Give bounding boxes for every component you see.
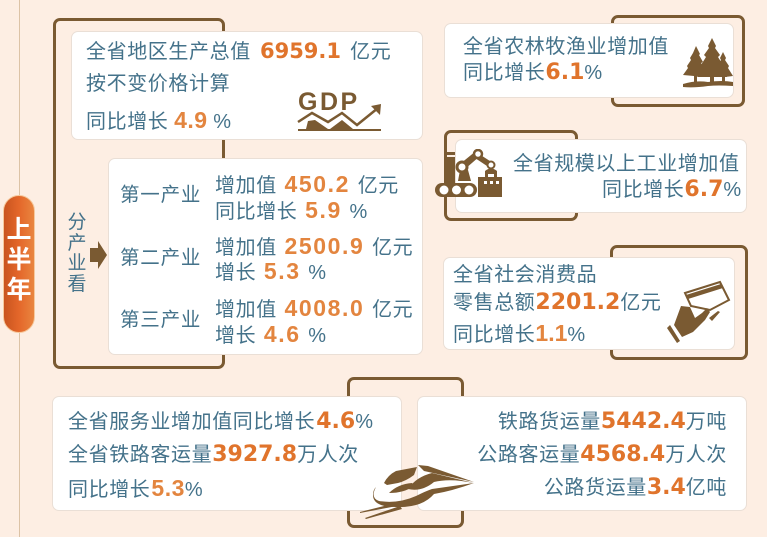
text: rail growth: 同比增长5.3% <box>68 475 203 501</box>
text: primary growth: 同比增长 5.9 % <box>215 197 368 223</box>
panel: agriculture <box>444 23 734 98</box>
text: rail passengers: 全省铁路客运量3927.8万人次 <box>68 442 359 467</box>
timeline line <box>19 0 20 537</box>
text: industry value: 全省规模以上工业增加值 <box>513 153 740 175</box>
panel: industry <box>455 139 747 213</box>
label: by industry: 看 <box>67 274 86 294</box>
label: by industry: 业 <box>67 253 86 274</box>
pill: first half of year <box>3 195 35 333</box>
frame: agriculture <box>611 15 745 107</box>
text: primary industry: 第一产业 <box>120 184 201 206</box>
text: constant price: 按不变价格计算 <box>86 73 230 95</box>
icon: arrow <box>90 241 107 269</box>
pill: first half of year: 上 <box>6 216 32 244</box>
panel: retail <box>443 257 735 350</box>
icon: GDP chart <box>297 88 381 131</box>
text: agriculture growth: 同比增长6.1% <box>463 60 603 85</box>
label: by industry: 产 <box>67 232 86 254</box>
icon: factory robot <box>435 149 502 197</box>
panel: sectors <box>108 158 423 355</box>
text: services growth: 全省服务业增加值同比增长4.6% <box>68 409 374 434</box>
pill: first half of year: 半 <box>6 246 32 274</box>
icon: hand with card <box>667 280 730 343</box>
text: secondary industry: 第二产业 <box>120 247 201 269</box>
label: by industry: 分 <box>67 212 86 233</box>
text: primary value: 增加值 450.2 亿元 <box>215 171 399 197</box>
text: road freight: 公路货运量3.4亿吨 <box>544 475 727 500</box>
icon: GDP chart: GDP <box>298 88 360 116</box>
frame: main bracket <box>53 18 225 369</box>
text: GDP total: 全省地区生产总值 6959.1 亿元 <box>86 39 391 63</box>
text: retail label: 全省社会消费品 <box>453 264 597 286</box>
panel: services and rail <box>52 396 402 511</box>
icon: trees <box>683 38 733 88</box>
icon: high-speed train <box>360 465 474 519</box>
frame: transport <box>347 377 464 528</box>
panel: freight <box>417 396 747 511</box>
text: GDP growth: 同比增长 4.9 % <box>86 107 232 133</box>
text: agriculture value: 全省农林牧渔业增加值 <box>463 36 669 58</box>
frame: industry <box>444 130 578 221</box>
text: tertiary industry: 第三产业 <box>120 309 201 331</box>
text: industry growth: 同比增长6.7% <box>602 177 742 202</box>
frame: retail <box>610 245 748 360</box>
pill: first half of year: 年 <box>6 276 32 304</box>
text: secondary value: 增加值 2500.9 亿元 <box>215 233 413 259</box>
text: retail growth: 同比增长1.1% <box>453 320 586 346</box>
text: retail total: 零售总额2201.2亿元 <box>453 290 662 315</box>
label: by industry <box>67 212 86 294</box>
text: tertiary growth: 增长 4.6 % <box>215 321 327 347</box>
text: rail freight: 铁路货运量5442.4万吨 <box>498 409 727 434</box>
text: tertiary value: 增加值 4008.0 亿元 <box>215 295 413 321</box>
text: secondary growth: 增长 5.3 % <box>215 258 327 284</box>
text: road passengers: 公路客运量4568.4万人次 <box>477 442 727 467</box>
panel: GDP <box>71 31 423 140</box>
